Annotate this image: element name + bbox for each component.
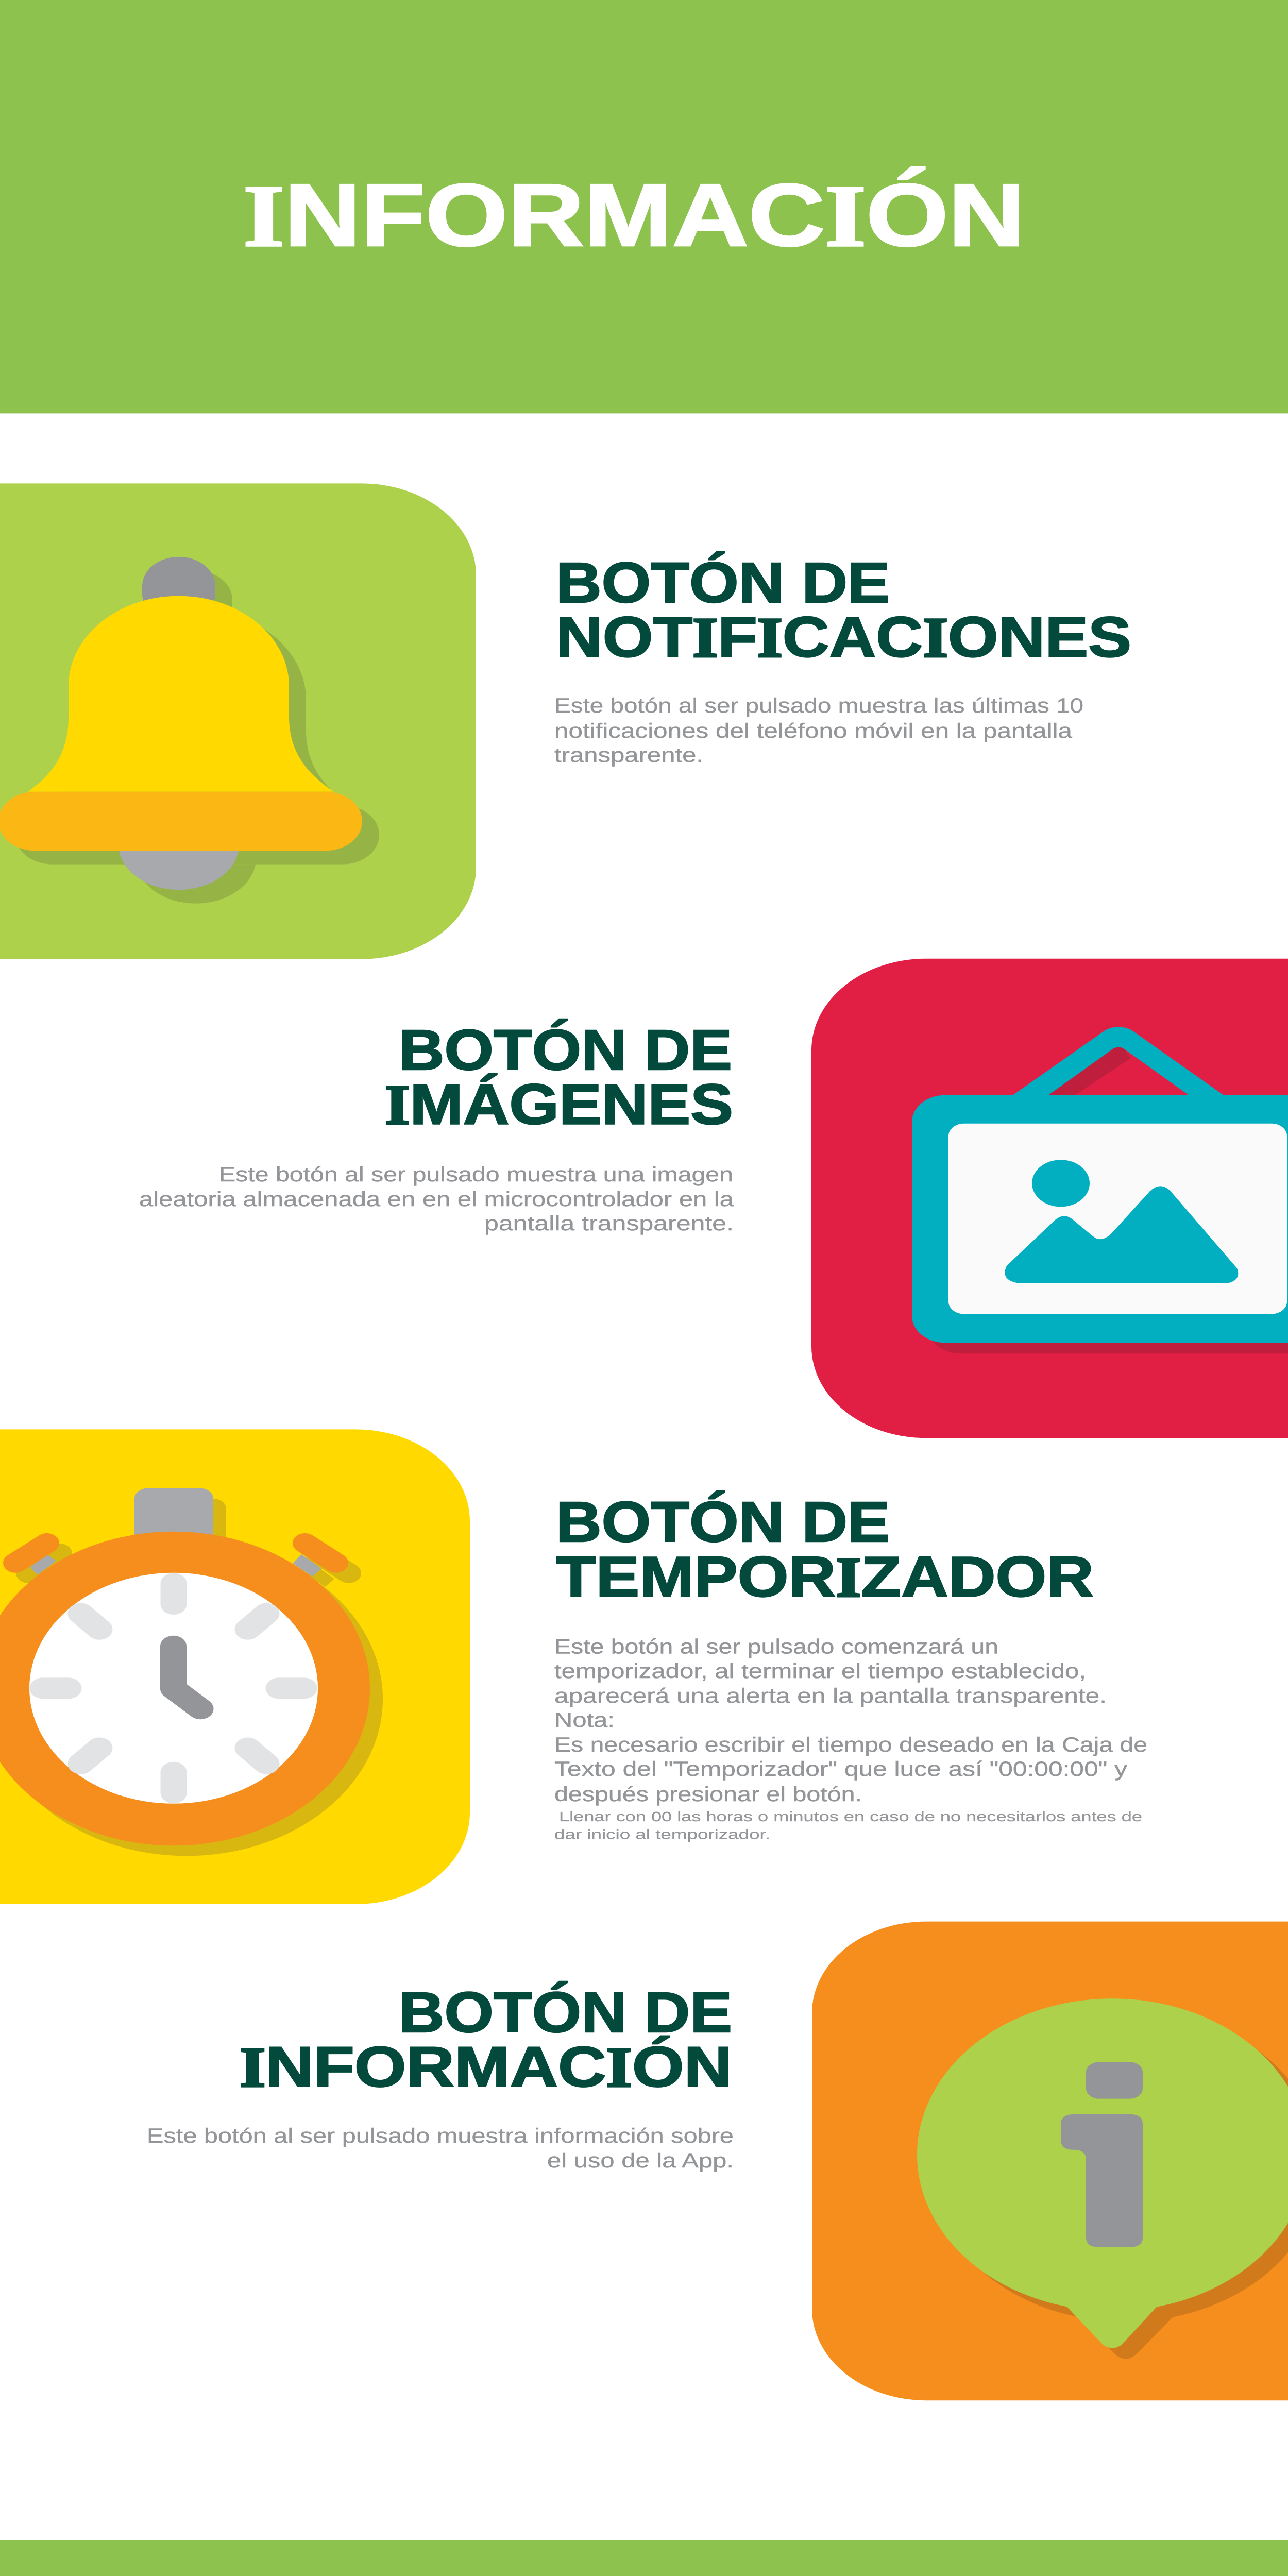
heading: botón de imágenes [385,1019,733,1137]
text block: notificaciones description: notificaciones del teléfono móvil en la pantalla [554,719,1073,742]
heading: botón de información [240,1981,732,2099]
text block: temporizador description: después presionar el botón. [554,1783,862,1806]
text block: notificaciones description [554,694,1083,767]
text block: temporizador description: Es necesario escribir el tiempo deseado en la Caja de [554,1733,1147,1756]
heading: botón de notificaciones [556,551,1131,669]
heading: botón de información: BOTÓN DE [399,1981,732,2044]
text block: temporizador description: Llenar con 00 las horas o minutos en caso de no necesitarlos antes de [559,1810,1142,1824]
text block: temporizador description: dar inicio al temporizador. [554,1828,770,1842]
heading: botón de temporizador [556,1490,1094,1609]
icon: bell [0,557,379,904]
text block: temporizador description: temporizador, al terminar el tiempo establecido, [554,1659,1086,1683]
panel: red icon tile [811,959,1288,1438]
text block: información description: Este botón al ser pulsado muestra información sobre [147,2124,734,2147]
panel: yellow icon tile [0,1429,470,1904]
heading: botón de imágenes: IMÁGENES [385,1073,733,1137]
panel: orange icon tile [812,1922,1288,2400]
text block: temporizador description [554,1635,1147,1842]
heading: botón de notificaciones: BOTÓN DE [556,551,890,615]
text block: notificaciones description: transparente. [554,743,703,767]
text block: temporizador description: aparecerá una alerta en la pantalla transparente. [554,1684,1107,1707]
text block: información description: el uso de la App. [547,2149,734,2172]
text block: imágenes description: aleatoria almacenada en en el microcontrolador en la [139,1188,734,1211]
text block: imágenes description: Este botón al ser pulsado muestra una imagen [219,1163,733,1186]
header band [0,0,1288,413]
heading: botón de información: INFORMACIÓN [240,2036,732,2099]
panel: green icon tile [0,483,476,959]
icon: info speech bubble [917,1998,1288,2359]
icon: hanging picture [912,1027,1288,1353]
heading: botón de imágenes: BOTÓN DE [399,1019,732,1082]
text block: temporizador description: Nota: [554,1708,615,1732]
footer band [0,2540,1288,2576]
text block: temporizador description: Texto del "Temporizador" que luce así "00:00:00" y [554,1757,1127,1781]
icon: stopwatch [0,1488,383,1856]
heading: botón de temporizador: TEMPORIZADOR [556,1545,1094,1609]
section: imágenes [139,959,1288,1438]
title: INFORMACIÓN [243,166,1025,265]
text block: temporizador description: Este botón al ser pulsado comenzará un [554,1635,998,1658]
text block: imágenes description [139,1163,734,1235]
text block: información description [147,2124,734,2172]
text block: notificaciones description: Este botón al ser pulsado muestra las últimas 10 [554,694,1083,717]
heading: botón de notificaciones: NOTIFICACIONES [556,605,1131,669]
section: temporizador [0,1429,1147,1904]
heading: botón de temporizador: BOTÓN DE [556,1490,890,1554]
text block: imágenes description: pantalla transparente. [484,1212,734,1235]
section: notificaciones [0,483,1131,959]
section: información [147,1922,1288,2400]
